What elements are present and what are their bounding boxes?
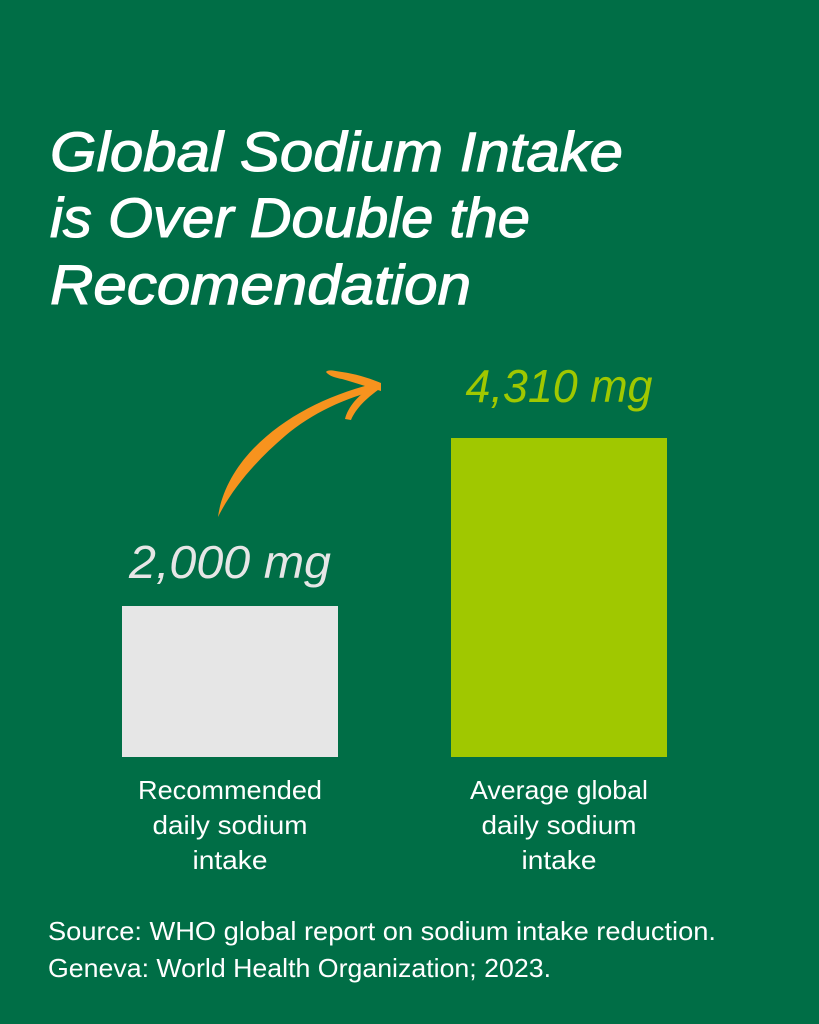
- label: average intake: [470, 775, 648, 875]
- bar: recommended: [122, 606, 338, 757]
- value label: 2,000 mg: 2,000 mg: [128, 536, 331, 588]
- bar: average global: [451, 438, 667, 757]
- value label: 4,310 mg: 4,310 mg: [466, 360, 653, 412]
- label: average intake: intake: [522, 845, 596, 875]
- source note: [48, 916, 716, 983]
- title: is Over Double the: [50, 186, 530, 249]
- title: Global Sodium Intake: [50, 120, 623, 183]
- source note: Source: WHO global report on sodium intake reduction.: [48, 916, 716, 946]
- icon: orange arrow: [218, 370, 381, 517]
- label: recommended intake: daily sodium: [152, 810, 308, 840]
- source note: Geneva: World Health Organization; 2023.: [48, 953, 551, 983]
- label: average intake: daily sodium: [482, 810, 636, 840]
- label: average intake: Average global: [470, 775, 648, 805]
- title: Recomendation: [50, 253, 471, 316]
- label: recommended intake: [138, 775, 322, 875]
- title: [50, 120, 623, 316]
- label: recommended intake: intake: [192, 845, 268, 875]
- label: recommended intake: Recommended: [138, 775, 322, 805]
